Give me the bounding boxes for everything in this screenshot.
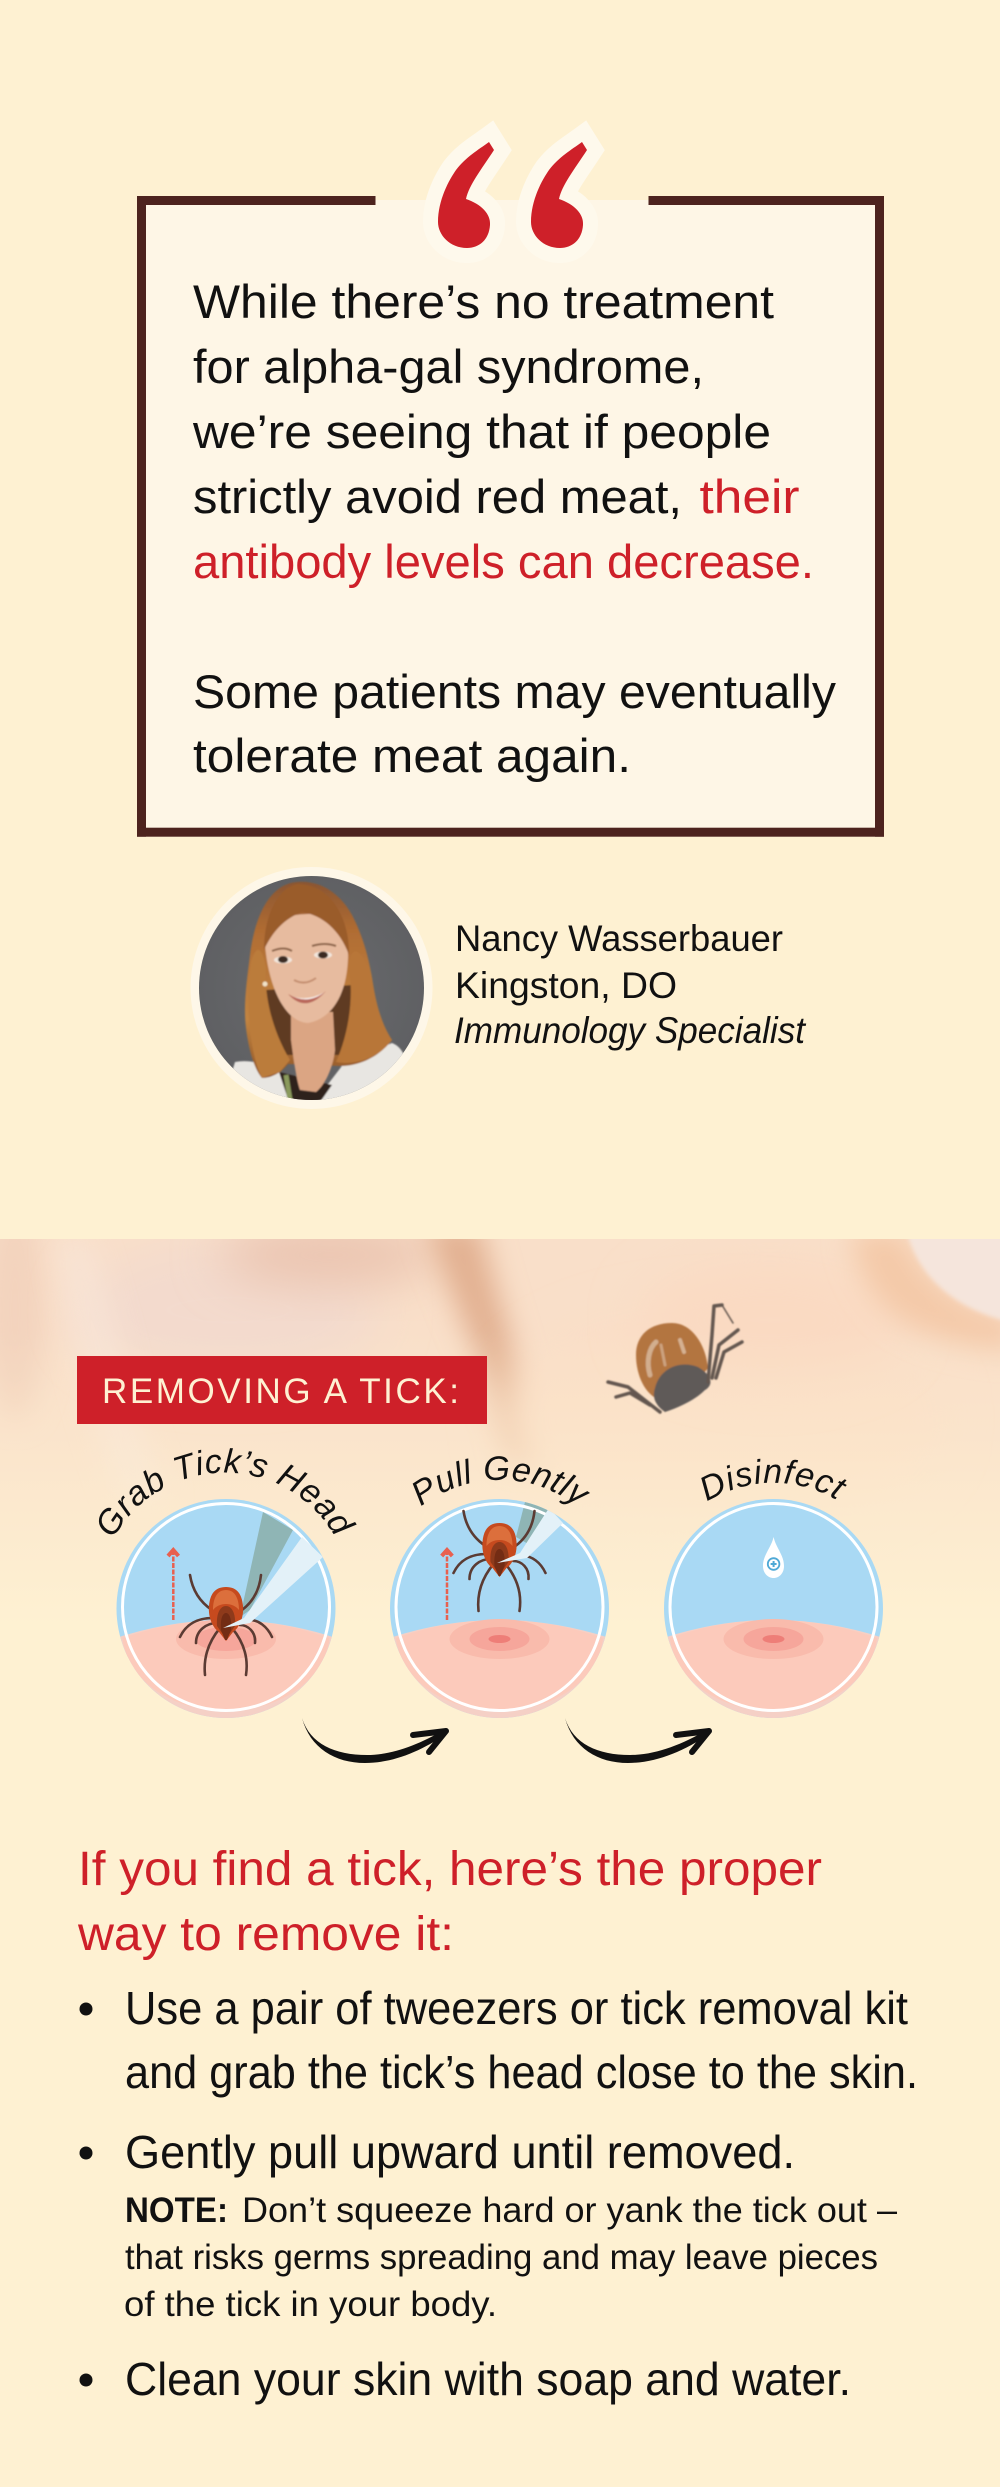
text: quote: strictly avoid red meat, — [193, 470, 682, 523]
bullet: use tweezers: Use a pair of tweezers or tick removal kit — [125, 1982, 908, 2034]
step 1 title: Grab Tick’s Head — [98, 1448, 357, 1534]
note text: of the tick in your body. — [124, 2285, 497, 2324]
text: quote: for alpha-gal syndrome, — [193, 340, 704, 393]
text: quote: While there’s no treatment — [193, 275, 774, 328]
step 3: disinfect — [664, 1458, 883, 1718]
text: doctor name and title: Immunology Specialist — [454, 1010, 807, 1051]
heading: proper way to remove: way to remove it: — [77, 1908, 454, 1961]
step 2: pull gently — [390, 1456, 609, 1718]
panel: quote box — [137, 196, 884, 837]
text: doctor name and title: Nancy Wasserbauer — [455, 918, 783, 959]
step 2 title: Pull Gently — [412, 1456, 590, 1506]
step 3 illustration — [658, 1499, 890, 1725]
step 1: grab tick's head — [98, 1448, 357, 1718]
bullet: clean skin: Clean your skin with soap and water. — [125, 2353, 851, 2405]
icon: disinfectant drop — [763, 1537, 784, 1578]
bullet: use tweezers — [80, 1982, 918, 2098]
text: quote: antibody levels can decrease. — [193, 535, 814, 588]
text: doctor name and title — [454, 918, 807, 1051]
text: quote: tolerate meat again. — [193, 729, 631, 782]
heading: proper way to remove — [77, 1843, 822, 1961]
step 2 arrow up — [442, 1550, 452, 1620]
step 3 title: Disinfect — [701, 1458, 847, 1501]
label: removing a tick — [77, 1356, 487, 1424]
portrait photo — [190, 867, 432, 1109]
step 2 illustration — [384, 1499, 616, 1725]
text: doctor name and title: Kingston, DO — [455, 965, 677, 1006]
label: removing a tick: REMOVING A TICK: — [102, 1372, 459, 1411]
note text: Don’t squeeze hard or yank the tick out – — [242, 2191, 898, 2230]
icon: quotation marks — [438, 142, 587, 248]
text: quote — [192, 275, 837, 782]
photo: tick — [608, 1305, 742, 1412]
text: quote: their — [700, 470, 800, 523]
bullet: pull upward: Gently pull upward until removed. — [125, 2126, 795, 2178]
note text: that risks germs spreading and may leave pieces — [125, 2238, 878, 2277]
note text — [124, 2191, 898, 2324]
bullet: use tweezers: and grab the tick’s head close to the skin. — [125, 2046, 918, 2098]
photo: skin background — [0, 1239, 1000, 1512]
heading: proper way to remove: If you find a tick, here’s the proper — [78, 1843, 822, 1896]
note text: NOTE: — [125, 2191, 228, 2230]
arrow: step 2 to step 3 — [565, 1718, 709, 1763]
arrow: step 1 to step 2 — [302, 1718, 446, 1763]
text: quote: we’re seeing that if people — [192, 405, 771, 458]
step 1 arrow up — [168, 1550, 178, 1620]
text: quote: Some patients may eventually — [193, 665, 837, 718]
step 1 illustration — [110, 1499, 342, 1725]
